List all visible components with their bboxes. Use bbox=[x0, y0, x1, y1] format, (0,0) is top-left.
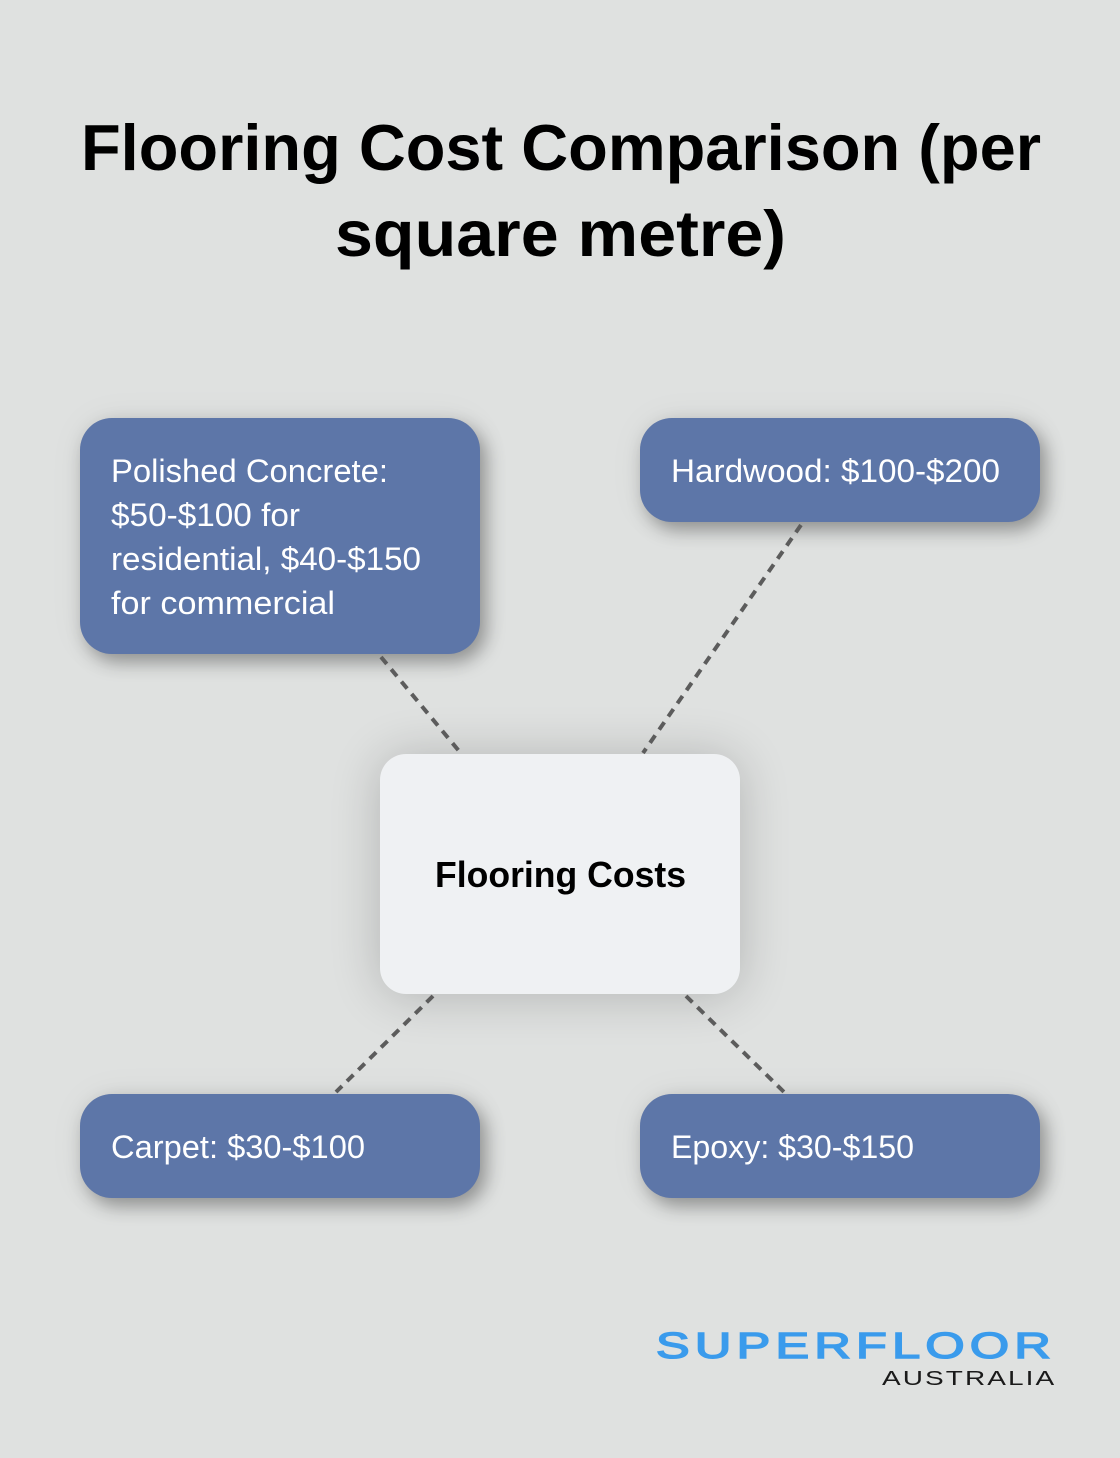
logo: Superfloor Australia: SUPERFLOOR bbox=[656, 1326, 1051, 1366]
panel: epoxy bbox=[640, 1094, 1040, 1198]
panel: carpet bbox=[80, 1094, 480, 1198]
panel: carpet: Carpet: $30-$100 bbox=[111, 1129, 365, 1165]
panel: polished concrete: for commercial bbox=[111, 585, 335, 621]
panel: flooring costs centre: Flooring Costs bbox=[435, 854, 686, 895]
title: Flooring Cost Comparison (per bbox=[81, 111, 1041, 184]
panel: polished concrete bbox=[80, 418, 480, 654]
title bbox=[81, 111, 1041, 270]
panel: polished concrete: residential, $40-$150 bbox=[111, 541, 421, 577]
panel: hardwood: Hardwood: $100-$200 bbox=[671, 453, 1000, 489]
panel: epoxy: Epoxy: $30-$150 bbox=[671, 1129, 914, 1165]
title: square metre) bbox=[335, 197, 786, 270]
logo: Superfloor Australia: AUSTRALIA bbox=[882, 1368, 1055, 1390]
panel: hardwood bbox=[640, 418, 1040, 522]
panel: polished concrete: $50-$100 for bbox=[111, 497, 300, 533]
panel: polished concrete: Polished Concrete: bbox=[111, 453, 388, 489]
panel: flooring costs centre bbox=[380, 754, 740, 994]
